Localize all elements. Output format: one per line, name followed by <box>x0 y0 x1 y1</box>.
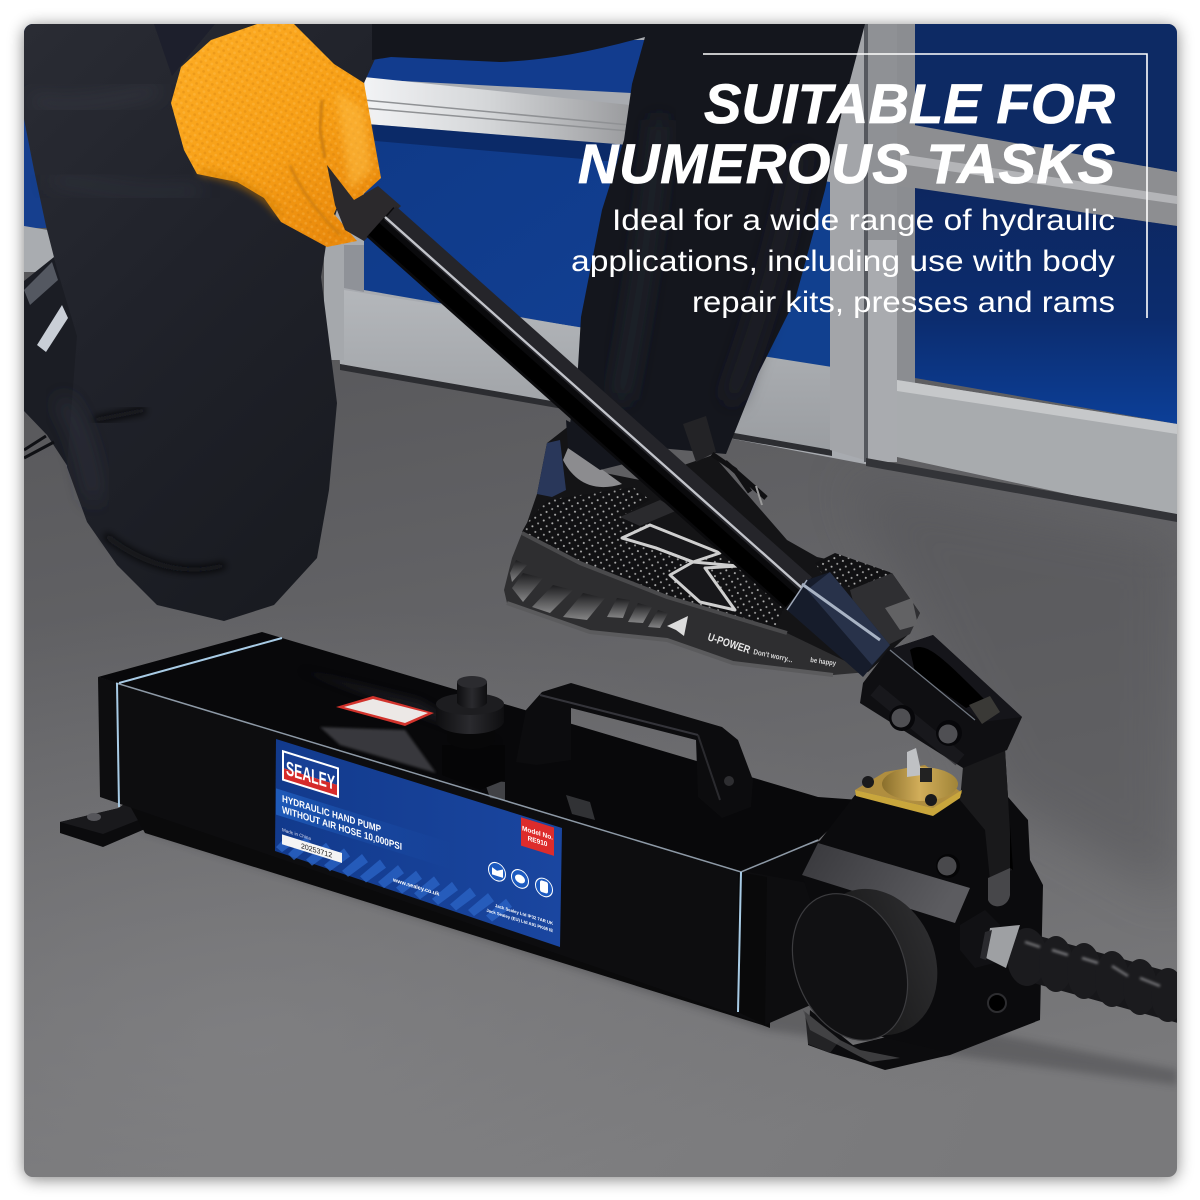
knurled ring <box>436 704 504 734</box>
leather panel <box>620 500 678 526</box>
collar <box>787 572 890 677</box>
upper blue drawer <box>362 40 650 94</box>
tread blocks <box>510 560 668 628</box>
label background <box>275 739 562 947</box>
headline: NUMEROUS TASKS <box>578 132 1115 195</box>
brass cylinder <box>855 748 962 816</box>
shoe: be happy <box>810 657 837 668</box>
shoe <box>504 416 920 675</box>
toe rubber <box>850 573 920 644</box>
clevis <box>860 635 1022 768</box>
wedge <box>738 840 824 886</box>
warning sticker <box>336 696 434 726</box>
product label: 20253712 <box>301 841 332 860</box>
lever post <box>960 750 1012 880</box>
person: sleeve <box>154 24 215 76</box>
made in china and barcode: Made in China <box>282 827 311 841</box>
ankle cuff <box>566 420 622 470</box>
title band <box>276 788 452 869</box>
logo: SEALEY <box>286 758 335 795</box>
filler cap <box>436 676 505 790</box>
aluminium bar <box>364 77 640 146</box>
cap reflection <box>442 745 505 790</box>
lion logo <box>667 616 688 636</box>
hose <box>1007 928 1190 1022</box>
model box: RE910 <box>528 835 548 849</box>
left column <box>24 24 46 228</box>
side X logo <box>622 525 738 610</box>
tube <box>380 222 797 594</box>
base plate <box>808 1000 1040 1070</box>
laces <box>712 454 766 498</box>
sock <box>563 448 622 487</box>
stripes <box>276 827 512 928</box>
lower blue door <box>364 141 617 328</box>
product label <box>275 739 562 947</box>
dark strip below bar <box>371 124 622 162</box>
headline: SUITABLE FOR <box>704 72 1116 135</box>
bevel <box>802 843 970 923</box>
tank shadow <box>140 815 1177 1085</box>
far foot: left <box>24 257 77 466</box>
main block <box>802 750 1043 1053</box>
pump tank <box>98 632 860 1028</box>
person: trousers, near leg <box>24 24 391 621</box>
model box: Model No. <box>522 825 553 842</box>
pillars <box>830 445 832 450</box>
screw on block <box>936 854 960 878</box>
product label: Jack Sealey (EU) Ltd A91 PK68 IE <box>486 908 553 933</box>
brand on sole: U-POWER <box>706 631 752 656</box>
carry handle <box>516 683 753 818</box>
top sheen <box>300 670 500 745</box>
text frame lines <box>703 54 1147 318</box>
glove <box>171 24 381 247</box>
right blue panels <box>915 24 1177 172</box>
front face <box>98 677 822 1025</box>
hose fitting <box>960 910 1020 968</box>
top face <box>98 632 860 872</box>
tongue tab <box>683 416 716 462</box>
slot <box>988 868 1010 906</box>
description <box>571 204 1115 319</box>
pump handle: grip in hand <box>327 165 401 241</box>
socket <box>988 994 1006 1012</box>
cabinets: background wall <box>24 24 1177 522</box>
side panel <box>738 872 767 1025</box>
model box <box>521 817 554 856</box>
mesh toe <box>815 553 892 587</box>
plinth <box>340 290 832 450</box>
addresses: Jack Sealey Ltd IP32 7AR UK <box>495 903 554 926</box>
description: applications, including use with body <box>571 245 1115 278</box>
pump handle <box>374 213 890 677</box>
pump head <box>771 635 1190 1070</box>
headline <box>578 72 1116 195</box>
mesh upper <box>522 487 787 637</box>
adjustment knob <box>771 870 959 1058</box>
product label: WITHOUT AIR HOSE 10,000PSI <box>282 805 402 853</box>
sole <box>504 533 868 675</box>
logo <box>282 750 339 798</box>
heel collar <box>537 440 566 497</box>
description: repair kits, presses and rams <box>692 286 1115 319</box>
right plinth <box>897 380 1177 518</box>
knob stem <box>457 682 487 708</box>
edge highlights <box>116 683 818 872</box>
cap base <box>447 725 495 749</box>
product name: HYDRAULIC HAND PUMP <box>282 794 381 836</box>
left mounting foot <box>60 795 169 847</box>
description: Ideal for a wide range of hydraulic <box>612 204 1115 237</box>
shoe body <box>522 425 920 672</box>
safety icons <box>488 860 552 899</box>
speckled pad <box>803 1010 900 1062</box>
base flange <box>130 806 770 1028</box>
person: trousers, far leg <box>372 24 865 454</box>
centre cabinet frame <box>320 24 870 465</box>
shoe: Don't worry... <box>753 647 794 664</box>
top reflections <box>320 727 436 773</box>
website: www.sealey.co.uk <box>392 877 440 898</box>
